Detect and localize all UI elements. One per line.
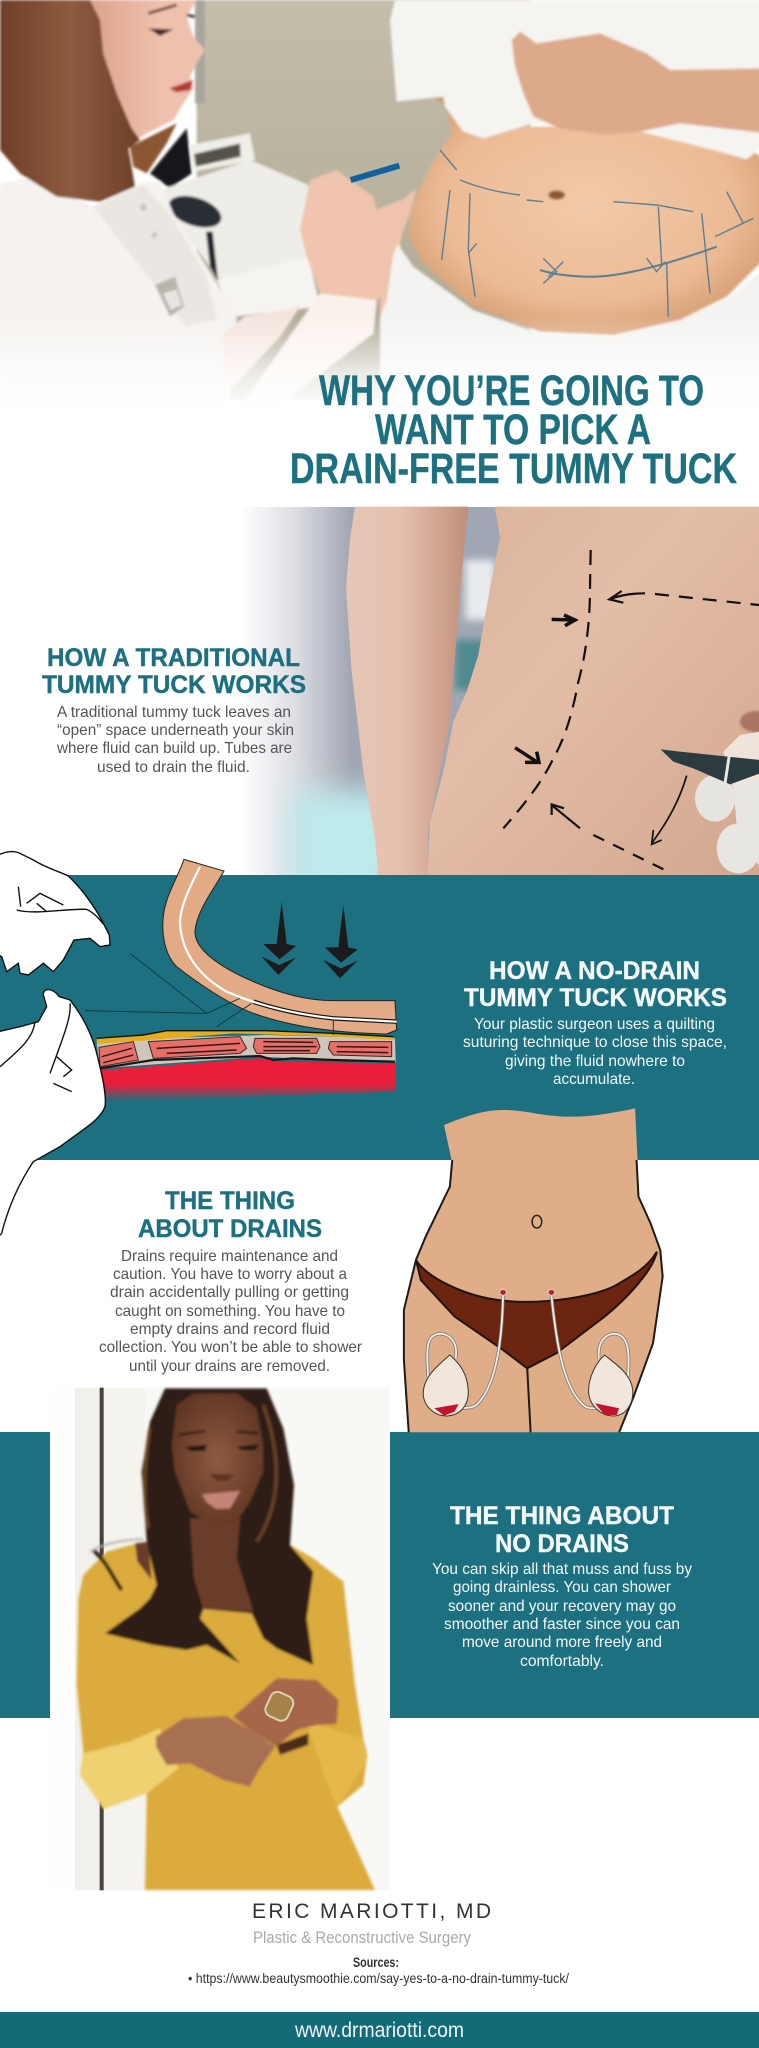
text block: how a no-drain tummy tuck works: suturing technique to close this space, <box>463 1034 727 1051</box>
text block: the thing about no drains: comfortably. <box>520 1653 604 1670</box>
blurred clinic background <box>290 507 519 900</box>
sources: Sources: <box>353 1955 399 1970</box>
photo: abdomen with dashed surgical markings <box>240 507 759 900</box>
neck and chest base <box>135 1542 152 1580</box>
sources: • https://www.beautysmoothie.com/say-yes-to-a-no-drain-tummy-tuck/ <box>188 1971 569 1986</box>
text block: the thing about no drains: sooner and your recovery may go <box>448 1598 676 1615</box>
text block: how a traditional tummy tuck works: where fluid can build up. Tubes are <box>56 740 292 757</box>
arm <box>346 507 468 877</box>
text block: the thing about drains: empty drains and record fluid <box>130 1321 330 1338</box>
doctor name: ERIC MARIOTTI, MD <box>252 1900 491 1923</box>
text block: how a traditional tummy tuck works <box>42 644 306 776</box>
text block: how a no-drain tummy tuck works: Your plastic surgeon uses a quilting <box>474 1016 715 1033</box>
text block: the thing about drains: caution. You have to worry about a <box>113 1266 347 1283</box>
hair <box>105 1388 313 1665</box>
icon: navel <box>532 1215 542 1228</box>
icon: gloved hands <box>0 852 110 1237</box>
layers: fat, muscle, red tissue <box>97 1031 396 1102</box>
text block: the thing about no drains: THE THING ABOUT <box>450 1502 674 1530</box>
text block: how a traditional tummy tuck works: used to drain the fluid. <box>97 759 250 776</box>
torso <box>427 507 759 877</box>
patient abdomen with pen markings <box>380 0 759 417</box>
photo: woman in yellow sweater <box>50 1388 390 1890</box>
text block: the thing about drains: until your drains are removed. <box>129 1358 330 1375</box>
footer band <box>0 2012 759 2048</box>
text block: the thing about no drains: You can skip all that muss and fuss by <box>432 1561 692 1578</box>
title <box>290 367 737 493</box>
panel: no-drain teal band <box>0 875 759 1160</box>
text block: how a no-drain tummy tuck works <box>463 957 727 1088</box>
sweater <box>77 1544 375 1890</box>
panel: no drains teal band <box>0 1432 759 1718</box>
icon: ring <box>263 1689 296 1723</box>
text block: the thing about no drains: NO DRAINS <box>495 1530 629 1558</box>
text block: the thing about no drains: going drainless. You can shower <box>453 1579 672 1596</box>
text block: the thing about drains: drain accidentally pulling or getting <box>110 1284 349 1301</box>
hands <box>156 1678 338 1787</box>
text block: how a traditional tummy tuck works: A traditional tummy tuck leaves an <box>57 704 291 721</box>
icon: surgical marker and glove <box>661 732 759 873</box>
text block: the thing about drains: caught on something. You have to <box>115 1303 345 1320</box>
text block: how a traditional tummy tuck works: “open” space underneath your skin <box>57 722 294 739</box>
text block: the thing about no drains: move around more freely and <box>462 1634 662 1651</box>
illustration: no-drain skin flap, muscle layers and gloved hands <box>0 852 397 1237</box>
surgeon and room <box>0 0 530 433</box>
sources <box>188 1955 569 1986</box>
text block: the thing about drains: collection. You won’t be able to shower <box>99 1339 363 1356</box>
text block: the thing about no drains <box>432 1502 692 1670</box>
text block: how a no-drain tummy tuck works: TUMMY TUCK WORKS <box>464 984 727 1012</box>
text block: the thing about no drains: smoother and faster since you can <box>444 1616 680 1633</box>
text block: the thing about drains: ABOUT DRAINS <box>138 1215 322 1243</box>
specialty: Plastic & Reconstructive Surgery <box>253 1928 471 1947</box>
bikini <box>416 1252 657 1368</box>
icon: double down arrows <box>262 902 358 978</box>
pointer lines <box>85 953 333 1035</box>
text block: the thing about drains <box>99 1187 363 1375</box>
skin flap <box>163 859 397 1034</box>
text block: the thing about drains: Drains require maintenance and <box>121 1248 338 1265</box>
title: WANT TO PICK A <box>375 406 651 454</box>
illustration: torso with surgical drains <box>404 1108 663 1432</box>
text block: how a no-drain tummy tuck works: giving the fluid nowhere to <box>505 1053 685 1070</box>
text block: how a no-drain tummy tuck works: HOW A NO-DRAIN <box>489 957 700 985</box>
dashed marking lines and arrows <box>503 550 759 872</box>
hero photo: surgeon marking abdomen <box>0 0 759 507</box>
text block: how a no-drain tummy tuck works: accumulate. <box>553 1071 635 1088</box>
face <box>172 1393 263 1526</box>
text block: how a traditional tummy tuck works: TUMMY TUCK WORKS <box>42 671 306 699</box>
footer band: www.drmariotti.com <box>294 2019 464 2042</box>
text block: the thing about drains: THE THING <box>165 1187 295 1215</box>
text block: how a traditional tummy tuck works: HOW A TRADITIONAL <box>47 644 300 672</box>
drain bulbs and tubes <box>423 1289 633 1416</box>
neck and chest <box>190 1518 253 1612</box>
